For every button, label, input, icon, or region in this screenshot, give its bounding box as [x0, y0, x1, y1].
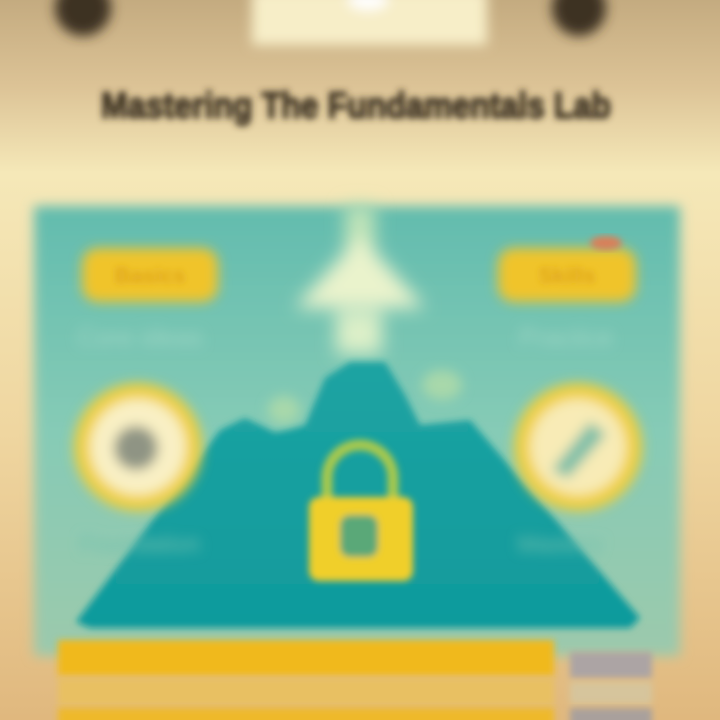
- legend: bottom chip: [570, 708, 652, 720]
- lowest yellow strip: [58, 708, 554, 720]
- top banner: [252, 0, 487, 45]
- icon: left circle badge: [74, 383, 202, 511]
- icon: right circle badge: [514, 383, 642, 511]
- legend: top chip: [570, 652, 652, 678]
- small light clouds: [268, 370, 462, 424]
- title: Mastering The Fundamentals Lab: [101, 85, 611, 126]
- right lower caption: Mastery: [517, 531, 603, 558]
- icon: padlock: [309, 445, 413, 581]
- icon: top right dark circle: [552, 0, 606, 36]
- right caption: Practice: [519, 322, 613, 352]
- top center beacon icon: [295, 205, 425, 354]
- left caption: Core ideas: [77, 322, 203, 352]
- bottom pale strip: [58, 678, 554, 706]
- mountain: [76, 362, 640, 628]
- panel: main teal board: [34, 205, 680, 656]
- left lower caption: Foundation: [80, 531, 200, 558]
- left yellow label: [82, 248, 218, 302]
- left yellow label: Basics: [115, 263, 185, 288]
- right yellow label: [498, 236, 636, 302]
- icon: top left dark circle: [55, 0, 111, 36]
- right yellow label: Skills: [538, 263, 596, 288]
- bottom yellow bar: [58, 640, 554, 676]
- legend: middle chip: [570, 682, 652, 704]
